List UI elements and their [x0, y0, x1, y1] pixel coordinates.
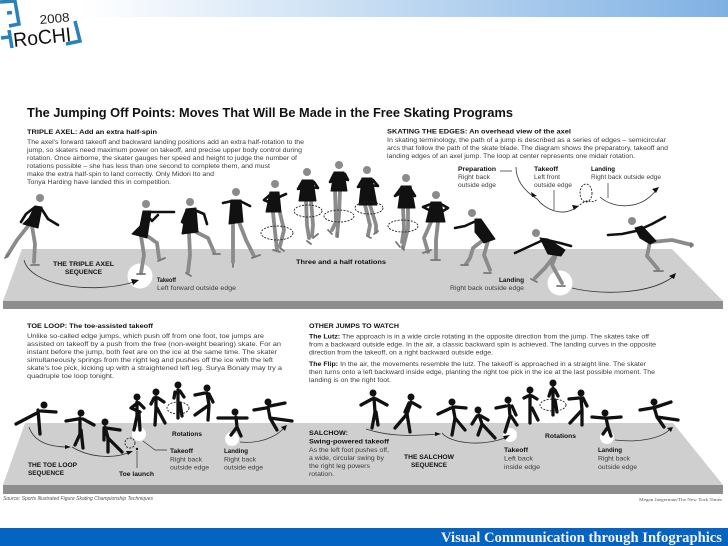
- label: toe landing: Right back: [224, 456, 257, 464]
- salchow skater 8: [569, 390, 587, 425]
- toe skater 9: [254, 399, 292, 430]
- triple axel skaters: [5, 161, 692, 286]
- text block: triple axel: rotations possible – she has less than one second to complete them, and must: [27, 163, 270, 170]
- footer bar: [0, 528, 728, 546]
- text block: salchow: a wide, circular swing by: [309, 455, 385, 462]
- salchow skater 3: [438, 399, 466, 435]
- text block: other jumps to watch: landing is on the right foot.: [309, 377, 391, 384]
- label: toe takeoff: [170, 448, 209, 472]
- text block: salchow: SALCHOW:: [309, 430, 348, 437]
- label: the salchow sequence: [404, 454, 455, 469]
- text block: triple axel: TRIPLE AXEL: Add an extra half-spin: [27, 129, 157, 136]
- label: the toe loop sequence: [28, 462, 78, 477]
- toe skater 1: [16, 402, 56, 434]
- lower ice floor: [3, 423, 723, 494]
- label: takeoff left forward outside edge: [157, 277, 236, 292]
- toe skater 3: [102, 419, 122, 452]
- label: preparation: [458, 166, 496, 189]
- label: toe landing: outside edge: [224, 464, 263, 472]
- label: salchow landing: outside edge: [598, 464, 637, 471]
- toe loop arcs: [29, 425, 287, 456]
- text block: salchow: the right leg powers: [309, 463, 370, 470]
- label: the triple axel sequence: THE TRIPLE AXEL: [53, 261, 114, 268]
- toe skater 2: [66, 410, 94, 448]
- label: three and a half rotations: Three and a half rotations: [296, 259, 387, 266]
- text block: toe loop: Unlike so-called edge jumps, which push off from one foot, toe jumps are: [27, 333, 265, 340]
- toe skater 8: [218, 409, 247, 436]
- skater 13: [608, 217, 692, 271]
- skater 9: [388, 174, 418, 250]
- text block: triple axel: Tonya Harding have landed this in competition.: [27, 179, 171, 186]
- salchow skater 7: [540, 380, 566, 415]
- salchow skater 10: [640, 399, 678, 427]
- source note: Source: Sports Illustrated Figure Skating Championship Techniques: [3, 496, 153, 502]
- label: salchow landing: Landing: [598, 447, 622, 454]
- text block: salchow: As the left foot pushes off,: [309, 447, 389, 454]
- label: landing right back outside edge: [450, 277, 524, 292]
- text block: skating the edges: arcs that follow the path of the skate blade. The diagram shows the preparatory, takeoff and: [387, 145, 668, 152]
- text block: toe loop: TOE LOOP: The toe-assisted takeoff: [27, 323, 154, 330]
- salchow skater 9: [592, 410, 621, 436]
- toe skater 6: [167, 382, 189, 418]
- skater 2: [132, 200, 174, 274]
- label: landing right back outside edge: Right back outside edge: [450, 285, 524, 292]
- skater 7: [324, 161, 354, 237]
- label: rotations: Rotations: [172, 431, 202, 438]
- logo: RoCHI 2008: [0, 1, 80, 52]
- text block: toe loop: simultaneously springs from the right leg and pushes off the ice with the left: [27, 357, 273, 364]
- text block: skating the edges: [387, 128, 668, 160]
- header gradient band: [83, 0, 728, 17]
- label: takeoff: Takeoff: [534, 166, 559, 173]
- text block: other jumps to watch: The Lutz: The approach is in a wide circle rotating in the opposite direction from the jump. The skates take off: [309, 334, 649, 340]
- skater 5: [261, 180, 293, 252]
- label: the salchow sequence: THE SALCHOW: [404, 454, 455, 461]
- edge diagram: [458, 166, 661, 212]
- label: landing: Landing: [591, 166, 615, 173]
- text block: other jumps to watch: The Flip: In the air, the movements resemble the lutz. The takeoff is approached in a straight line. The skater: [309, 361, 647, 368]
- label: salchow landing: Right back: [598, 456, 631, 462]
- label: salchow takeoff: Takeoff: [504, 447, 529, 454]
- salchow skater 2: [395, 394, 420, 432]
- label: preparation: outside edge: [458, 182, 496, 189]
- text block: toe loop: instant before the jump, both feet are on the ice at the same time. The skater: [27, 349, 278, 356]
- label: the salchow sequence: SEQUENCE: [411, 462, 448, 469]
- text block: toe loop: [27, 323, 282, 380]
- text block: toe loop: skate's toe pick, kicking up with a straightened left leg. Surya Bonaly may try a: [27, 365, 282, 372]
- skater 11: [455, 209, 495, 273]
- edge path curves: [500, 167, 659, 212]
- toe skater 5: [151, 389, 165, 425]
- label: salchow takeoff: [504, 447, 540, 471]
- skater 1: [5, 194, 58, 265]
- upper sequence arcs: [24, 260, 676, 292]
- label: salchow takeoff: Left back: [504, 456, 534, 462]
- label: takeoff: [534, 166, 572, 189]
- label: toe launch: Toe launch: [119, 471, 154, 478]
- toe launch marks: [125, 438, 167, 468]
- title: The Jumping Off Points: Moves That Will Be Made in the Free Skating Programs: [27, 106, 513, 120]
- label: takeoff left forward outside edge: Left forward outside edge: [157, 285, 236, 292]
- label: takeoff: outside edge: [534, 182, 572, 189]
- toe skater 4: [131, 394, 144, 430]
- skater 4: [223, 188, 260, 267]
- footer bar: Visual Communication through Infographics: [441, 530, 722, 546]
- salchow arcs: [366, 427, 673, 443]
- salchow skater 1: [361, 390, 387, 428]
- text block: other jumps to watch: from a backward outside edge. In the air, a classic backward spin is achieved. The landing curves in the opposite: [309, 342, 656, 348]
- text block: salchow: rotation.: [309, 471, 334, 478]
- takeoff and landing spots: [128, 264, 614, 446]
- text block: skating the edges: In skating terminology, the path of a jump is described as a series of edges – semicircular: [387, 137, 667, 144]
- text block: triple axel: [26, 129, 304, 186]
- text block: triple axel: rotation. Once airborne, the skater gauges her speed and height to judge the number of: [27, 155, 297, 162]
- logo: RoCHI 2008: 2008: [39, 10, 70, 27]
- logo: RoCHI 2008: RoCHI: [12, 24, 72, 52]
- label: the toe loop sequence: THE TOE LOOP: [28, 462, 78, 469]
- label: the toe loop sequence: SEQUENCE: [28, 470, 65, 477]
- salchow skaters: [361, 380, 678, 438]
- label: takeoff: Left front: [534, 174, 560, 181]
- skater 12: [515, 229, 571, 286]
- text block: salchow: Swing-powered takeoff: [309, 438, 390, 446]
- text block: salchow: [309, 430, 390, 478]
- skater 3: [182, 198, 220, 276]
- label: preparation: Preparation: [458, 166, 496, 173]
- text block: triple axel: jump, so skaters need maximum power on takeoff, and precise upper body control during: [26, 147, 302, 154]
- skater 8: [355, 166, 383, 238]
- text block: other jumps to watch: direction from the takeoff, on a right backward outside edge.: [309, 350, 493, 356]
- text block: triple axel: make the extra half-spin to land correctly. Only Midori Ito and: [27, 171, 214, 178]
- salchow skater 5: [496, 397, 517, 432]
- text block: skating the edges: landing edges of an axel jump. The loop at center represents one midair rotation.: [387, 153, 635, 160]
- text block: skating the edges: SKATING THE EDGES: An overhead view of the axel: [387, 128, 571, 136]
- skater 10: [423, 191, 448, 260]
- label: landing right back outside edge: Landing: [499, 277, 524, 284]
- skater 6: [294, 168, 322, 244]
- label: toe landing: Landing: [224, 448, 248, 455]
- text block: toe loop: assisted on takeoff by a push from the free (non-weight bearing) skate. For an: [27, 341, 282, 348]
- label: salchow landing: [598, 447, 637, 471]
- salchow skater 4: [472, 407, 495, 438]
- label: takeoff left forward outside edge: Takeoff: [157, 277, 177, 284]
- label: salchow takeoff: inside edge: [504, 464, 540, 471]
- label: the triple axel sequence: [53, 261, 114, 276]
- label: toe takeoff: outside edge: [170, 464, 209, 472]
- label: toe landing: [224, 448, 263, 472]
- toe skater 7: [195, 385, 213, 420]
- text block: other jumps to watch: then turns onto a left backward inside edge, planting the right toe pick in the ice at the last possible moment. The: [309, 369, 655, 376]
- credit: Megan Jaegerman/The New York Times: [639, 497, 722, 502]
- label: landing: [591, 166, 661, 181]
- label: salchow rotations: Rotations: [545, 433, 576, 440]
- text block: other jumps to watch: OTHER JUMPS TO WATCH: [309, 323, 399, 330]
- label: toe takeoff: Right back: [170, 456, 203, 464]
- toe loop skaters: [16, 382, 292, 468]
- text block: toe loop: quadruple toe loop tonight.: [27, 373, 114, 380]
- label: preparation: Right back: [458, 174, 491, 181]
- upper ice floor: [3, 249, 723, 309]
- label: toe takeoff: Takeoff: [170, 448, 194, 455]
- text block: other jumps to watch: [309, 323, 656, 384]
- salchow skater 6: [524, 387, 538, 423]
- text block: triple axel: The axel's forward takeoff and backward landing positions add an extra half-rotation to the: [27, 139, 304, 146]
- label: landing: Right back outside edge: [591, 174, 661, 181]
- label: the triple axel sequence: SEQUENCE: [65, 269, 103, 276]
